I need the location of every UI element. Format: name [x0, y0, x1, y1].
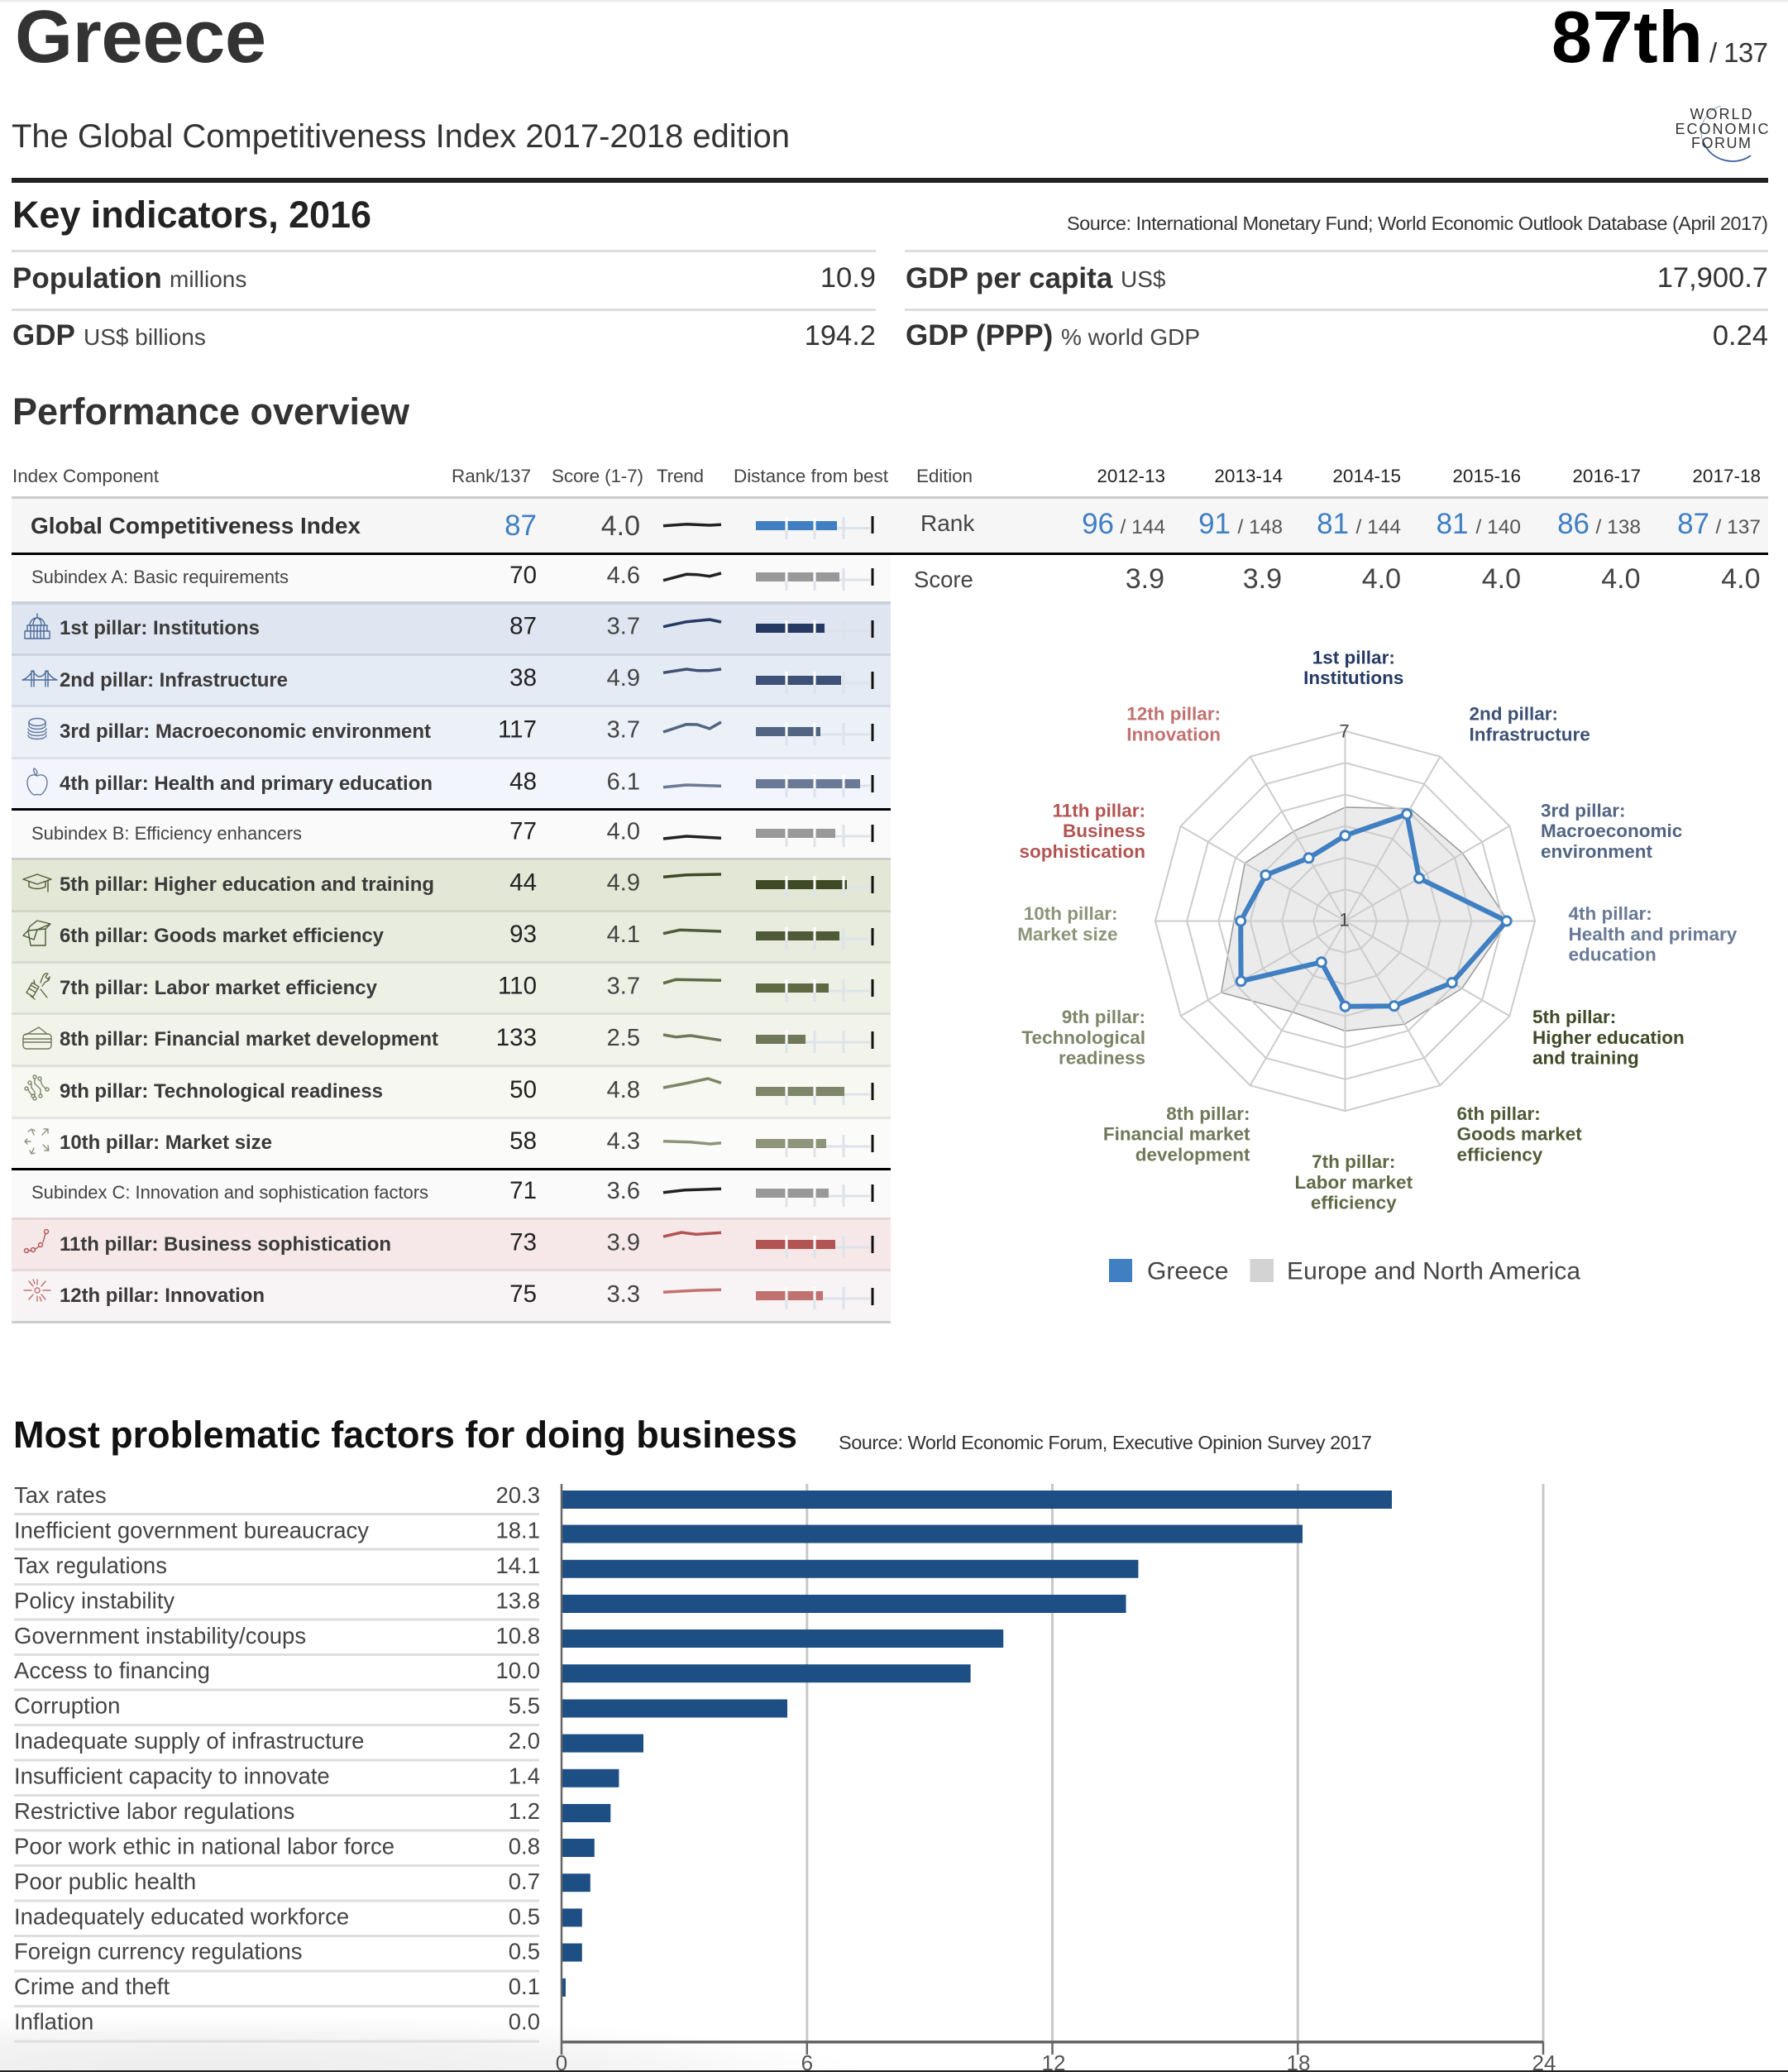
row: 11th pillar: 3.9	[607, 1229, 640, 1256]
icon: apple	[27, 768, 47, 795]
factor values: 2.0	[509, 1728, 540, 1754]
radar label: 5th pillar: Higher education	[1532, 1027, 1685, 1048]
indicator: GDP: GDP	[12, 319, 75, 352]
indicator: GDP PPP: GDP (PPP)	[906, 319, 1053, 352]
sparkline: 4th pillar trend	[663, 785, 721, 787]
radar chart	[1017, 647, 1738, 1285]
score history row: 4.0	[1601, 563, 1641, 595]
row: 8th pillar: 2.5	[607, 1025, 640, 1051]
factor values: 20.3	[495, 1482, 540, 1508]
icon: rising nodes	[25, 1229, 48, 1252]
source note: Source: International Monetary Fund; World Economic Outlook Database (April 2017)	[1067, 213, 1768, 234]
factor labels: Tax rates	[14, 1482, 107, 1508]
radar label: 8th pillar: 8th pillar:	[1166, 1103, 1250, 1124]
radar label: 9th pillar: Technological	[1021, 1027, 1145, 1048]
radar label: 7th pillar	[1295, 1151, 1413, 1213]
edition header: 2015-16	[1452, 466, 1521, 486]
edition header: 2014-15	[1332, 466, 1401, 486]
bar: 5th pillar distance from best	[756, 876, 872, 898]
bar: 12th pillar distance from best	[756, 1287, 872, 1309]
Greece score markers	[1236, 810, 1511, 1011]
radar label: 8th pillar: development	[1135, 1145, 1250, 1165]
score history row: 3.9	[1243, 563, 1282, 595]
indicator: GDP: US$ billions	[84, 324, 206, 350]
factor values: 5.5	[509, 1693, 540, 1719]
radar plot: 1	[1339, 910, 1350, 930]
rank history row: / 138	[1596, 516, 1641, 538]
row: Global Competitiveness Index: 4.0	[601, 510, 640, 542]
axes	[562, 1484, 1543, 2055]
logo: World Economic Forum: ECONOMIC	[1676, 121, 1768, 137]
table header: Trend	[657, 466, 704, 486]
bar: GCI distance from best	[756, 516, 872, 539]
rank history row: / 148	[1237, 516, 1283, 538]
factor values: 1.4	[509, 1763, 540, 1788]
edition header: 2017-18	[1692, 466, 1761, 486]
row: 7th pillar: 3.7	[607, 973, 640, 999]
radar label: 2nd pillar	[1469, 703, 1590, 744]
radar label: 2nd pillar: 2nd pillar:	[1469, 703, 1558, 725]
bar: 8th pillar distance from best	[756, 1031, 872, 1053]
radar label: 9th pillar: readiness	[1059, 1047, 1145, 1069]
row: Subindex A: Subindex A: Basic requirements	[31, 567, 289, 587]
sparkline: 5th pillar trend	[663, 874, 721, 877]
radar label: 3rd pillar	[1541, 801, 1682, 862]
radar label: 11th pillar	[1019, 801, 1145, 862]
indicator: population	[12, 262, 876, 294]
indicator: population: 10.9	[820, 262, 876, 294]
row: 12th pillar: 75	[509, 1280, 537, 1308]
indicator: GDP PPP: 0.24	[1713, 320, 1768, 352]
factor labels: Crime and theft	[14, 1974, 170, 1999]
factor labels: Inadequately educated workforce	[14, 1903, 349, 1929]
row: Subindex C: 3.6	[607, 1178, 640, 1204]
row: Subindex B: Subindex B: Efficiency enhancers	[31, 823, 302, 844]
row: 9th pillar: 50	[509, 1076, 537, 1103]
row: 6th pillar: 4.1	[607, 921, 640, 948]
score history row	[914, 563, 1760, 595]
rank history row: / 144	[1120, 516, 1165, 538]
sparkline: 2nd pillar trend	[663, 669, 721, 672]
heading: key indicators: Key indicators, 2016	[12, 194, 371, 236]
row: 12th pillar	[24, 1280, 872, 1309]
row: 2nd pillar: 4.9	[607, 665, 640, 691]
row: 9th pillar	[25, 1075, 872, 1105]
factor labels: Access to financing	[14, 1658, 210, 1683]
row: 5th pillar: 44	[509, 869, 537, 897]
factor values: 0.8	[509, 1833, 540, 1859]
row: 3rd pillar: 117	[498, 716, 537, 743]
radar label: 7th pillar: efficiency	[1311, 1193, 1397, 1213]
indicator: population: Population	[12, 262, 162, 294]
panel: key indicators	[12, 194, 1768, 352]
bar: 11th pillar distance from best	[756, 1236, 872, 1258]
icon: wrench and hand	[26, 974, 50, 999]
row: Subindex C: 71	[509, 1177, 537, 1204]
indicator: GDP per capita: GDP per capita	[906, 262, 1113, 294]
radar label: 6th pillar	[1457, 1103, 1582, 1165]
rank history row: / 144	[1356, 516, 1401, 538]
sparkline: 10th pillar trend	[663, 1141, 721, 1144]
row: Global Competitiveness Index: 87	[504, 510, 537, 542]
radar label: 8th pillar	[1103, 1103, 1250, 1165]
score history row: Score	[914, 567, 973, 592]
factor values: 0.1	[509, 1974, 540, 1999]
row: 5th pillar	[23, 869, 872, 898]
factor values: 10.8	[495, 1623, 540, 1649]
factor labels: Insufficient capacity to innovate	[14, 1763, 330, 1788]
indicator: GDP per capita: 17,900.7	[1657, 262, 1768, 294]
radar label: 5th pillar: 5th pillar:	[1532, 1007, 1616, 1027]
logo: World Economic Forum	[1676, 106, 1768, 161]
table header: Index Component	[12, 466, 160, 486]
icon: capitol building	[25, 614, 50, 639]
row: 3rd pillar: 3rd pillar: Macroeconomic environment	[60, 720, 431, 743]
score history row: 4.0	[1482, 563, 1521, 595]
row: 1st pillar: 1st pillar: Institutions	[60, 617, 260, 639]
icon: circuit nodes	[25, 1075, 49, 1100]
edition header	[916, 466, 1761, 486]
rank history row: 81	[1317, 508, 1349, 540]
radar label: 11th pillar: sophistication	[1019, 841, 1145, 862]
factor labels	[14, 1482, 394, 2035]
radar label: 1st pillar	[1303, 647, 1403, 688]
row: 10th pillar	[25, 1127, 872, 1157]
radar label: 4th pillar	[1568, 903, 1738, 964]
row: 2nd pillar: 2nd pillar: Infrastructure	[60, 669, 288, 691]
row: 7th pillar: 7th pillar: Labor market efficiency	[60, 977, 378, 999]
row: 6th pillar	[23, 921, 872, 950]
factor values	[495, 1482, 540, 2035]
indicator: GDP per capita: US$	[1121, 266, 1166, 292]
score history row: 3.9	[1126, 563, 1164, 595]
row: Subindex B	[31, 817, 872, 847]
row: 3rd pillar	[28, 716, 872, 745]
logo: World Economic Forum: FORUM	[1691, 135, 1751, 151]
row: 2nd pillar	[22, 664, 872, 694]
row: 7th pillar	[26, 973, 872, 1002]
radar label: 12th pillar: Innovation	[1126, 725, 1221, 744]
radar label: 5th pillar: and training	[1532, 1047, 1639, 1069]
bar: subindex B distance from best	[756, 825, 872, 847]
heading: most problematic factors: Most problematic factors for doing business	[13, 1414, 797, 1456]
radar label: 7th pillar: Labor market	[1295, 1172, 1413, 1193]
radar label: 7th pillar: 7th pillar:	[1312, 1151, 1395, 1172]
edition header: Edition	[916, 466, 973, 486]
panel: problematic factors list	[14, 1482, 540, 2043]
radar label: 3rd pillar: 3rd pillar:	[1541, 801, 1626, 821]
radar label: 4th pillar: 4th pillar:	[1568, 903, 1652, 924]
overall rank	[1551, 0, 1768, 78]
factor labels: Tax regulations	[14, 1553, 167, 1578]
row: 4th pillar: 48	[509, 768, 537, 796]
factor labels: Inflation	[14, 2009, 93, 2035]
rank history row: 96	[1082, 508, 1114, 540]
row: Subindex B: 4.0	[607, 819, 640, 845]
row: Subindex C: Subindex C: Innovation and sophistication factors	[31, 1182, 428, 1203]
indicator: GDP PPP	[906, 319, 1768, 352]
icon: graduation cap	[23, 874, 51, 892]
table header: Score (1-7)	[552, 466, 643, 486]
sparkline: 7th pillar trend	[663, 979, 721, 983]
bar: 2nd pillar distance from best	[756, 672, 872, 694]
panel: performance table	[12, 466, 1768, 1323]
indicator: population: millions	[170, 266, 246, 292]
row: 1st pillar	[25, 612, 872, 642]
edition header: 2016-17	[1572, 466, 1641, 486]
radar label: 10th pillar	[1017, 903, 1118, 945]
row: 9th pillar: 9th pillar: Technological readiness	[60, 1080, 383, 1103]
radar label: 5th pillar	[1532, 1007, 1685, 1069]
row: 5th pillar: 4.9	[607, 870, 640, 897]
row: 3rd pillar: 3.7	[607, 716, 640, 743]
factor values: 13.8	[495, 1587, 540, 1613]
row: 6th pillar: 93	[509, 921, 537, 948]
row: Global Competitiveness Index	[31, 510, 872, 542]
radar label: 12th pillar	[1126, 703, 1221, 744]
row: 6th pillar: 6th pillar: Goods market efficiency	[60, 925, 385, 947]
factor labels: Restrictive labor regulations	[14, 1798, 294, 1824]
row: 4th pillar: 4th pillar: Health and primary education	[60, 773, 433, 795]
table header: Rank/137	[452, 466, 531, 486]
radar label: 9th pillar: 9th pillar:	[1062, 1007, 1145, 1027]
sparkline: subindex A trend	[663, 573, 721, 581]
rank history row: 87	[1677, 508, 1709, 540]
sparkline: 11th pillar trend	[663, 1232, 721, 1237]
rank history row: / 140	[1475, 516, 1521, 538]
score history row: 4.0	[1362, 563, 1401, 595]
row: 7th pillar: 110	[498, 973, 537, 999]
row: 8th pillar	[23, 1024, 872, 1053]
factor values: 1.2	[509, 1798, 540, 1824]
radar label: 10th pillar: Market size	[1017, 924, 1118, 945]
bar: subindex C distance from best	[756, 1184, 872, 1207]
heading: performance overview: Performance overview	[12, 390, 410, 433]
sparkline: GCI trend	[663, 524, 721, 526]
radar label: 4th pillar: Health and primary	[1568, 924, 1738, 945]
radar label: 8th pillar: Financial market	[1103, 1123, 1250, 1145]
Greece score line	[1241, 814, 1507, 1007]
sparkline: 9th pillar trend	[663, 1079, 721, 1088]
radar label: 1st pillar: 1st pillar:	[1312, 647, 1395, 668]
factor labels: Corruption	[14, 1693, 120, 1719]
sparkline: 6th pillar trend	[663, 930, 721, 934]
factor labels: Government instability/coups	[14, 1623, 306, 1649]
bar: 10th pillar distance from best	[756, 1135, 872, 1157]
radar label: 1st pillar: Institutions	[1303, 668, 1403, 688]
row: Subindex C	[31, 1177, 872, 1207]
icon: open box	[23, 921, 50, 945]
rank history row: Rank	[920, 510, 975, 536]
radar plot: 7	[1339, 721, 1350, 741]
radar label: 6th pillar: efficiency	[1457, 1145, 1543, 1165]
radar label: 10th pillar: 10th pillar:	[1024, 903, 1118, 924]
row: Subindex A: 4.6	[607, 562, 640, 589]
radar label: 11th pillar: 11th pillar:	[1052, 801, 1145, 821]
sparkline: 3rd pillar trend	[663, 722, 721, 732]
edition header: 2012-13	[1097, 466, 1165, 486]
sparkline: 1st pillar trend	[663, 620, 721, 627]
sparkline: 8th pillar trend	[663, 1035, 721, 1041]
bar: 4th pillar distance from best	[756, 775, 872, 797]
icon: outward arrows	[25, 1129, 49, 1154]
factor labels: Poor public health	[14, 1869, 196, 1894]
row: 4th pillar: 6.1	[607, 769, 640, 796]
legend	[1109, 1257, 1580, 1285]
factor labels: Inadequate supply of infrastructure	[14, 1728, 364, 1754]
factor labels: Foreign currency regulations	[14, 1939, 303, 1964]
bar: 6th pillar distance from best	[756, 927, 872, 950]
icon: spark burst	[24, 1280, 50, 1301]
factor values: 0.0	[509, 2009, 540, 2035]
row: 10th pillar: 58	[509, 1127, 537, 1155]
radar label: 2nd pillar: Infrastructure	[1469, 725, 1590, 744]
score history row: 4.0	[1721, 563, 1760, 595]
rank history row: 86	[1557, 508, 1590, 540]
row: 11th pillar: 73	[509, 1229, 537, 1256]
factor values: 0.5	[509, 1939, 540, 1964]
legend: Europe and North America	[1287, 1257, 1580, 1285]
row: 12th pillar: 3.3	[607, 1281, 640, 1308]
row: 4th pillar	[27, 768, 872, 797]
factor labels: Inefficient government bureaucracy	[14, 1517, 369, 1543]
radar label: 11th pillar: Business	[1063, 821, 1145, 841]
row: Subindex B: 77	[509, 817, 537, 845]
factor labels: Poor work ethic in national labor force	[14, 1833, 394, 1859]
row: 8th pillar: 133	[496, 1024, 537, 1051]
logo: World Economic Forum: WORLD	[1690, 106, 1752, 122]
axis tick labels	[556, 2050, 1556, 2072]
factor values: 10.0	[495, 1658, 540, 1683]
radar label: 3rd pillar: environment	[1541, 841, 1653, 862]
radar plot	[1155, 721, 1535, 1111]
row: 10th pillar: 10th pillar: Market size	[60, 1132, 272, 1154]
row: 1st pillar: 3.7	[607, 614, 640, 640]
factor values: 0.7	[509, 1869, 540, 1894]
indicator: GDP PPP: % world GDP	[1061, 324, 1200, 350]
row: 1st pillar: 87	[509, 612, 537, 640]
radar label: 12th pillar: 12th pillar:	[1126, 703, 1221, 725]
radar label: 3rd pillar: Macroeconomic	[1541, 821, 1682, 841]
bar: subindex A distance from best	[756, 568, 872, 591]
row: 12th pillar: 12th pillar: Innovation	[60, 1285, 265, 1307]
bar chart: problematic factors	[556, 1484, 1556, 2072]
row: 2nd pillar: 38	[509, 664, 537, 691]
table header: Distance from best	[734, 466, 889, 486]
icon: bank cards	[23, 1027, 51, 1049]
subtitle: The Global Competitiveness Index 2017-2018 edition	[12, 118, 790, 155]
sparkline: 12th pillar trend	[663, 1290, 721, 1292]
sparkline: subindex C trend	[663, 1189, 721, 1193]
row: 11th pillar	[25, 1229, 872, 1258]
row: 10th pillar: 4.3	[607, 1128, 640, 1155]
panel: edition history table	[914, 466, 1761, 595]
factor values: 0.5	[509, 1903, 540, 1929]
bar: 9th pillar distance from best	[756, 1083, 872, 1105]
bar: 3rd pillar distance from best	[756, 723, 872, 745]
row: Subindex A	[31, 562, 872, 591]
bar: 7th pillar distance from best	[756, 979, 872, 1002]
rank history row: 81	[1437, 508, 1469, 540]
row: 8th pillar: 8th pillar: Financial market development	[60, 1028, 438, 1050]
edition header: 2013-14	[1214, 466, 1283, 486]
bars	[562, 1491, 1392, 1997]
row: 5th pillar: 5th pillar: Higher education and training	[60, 873, 434, 896]
source note: opinion survey: Source: World Economic Forum, Executive Opinion Survey 2017	[839, 1432, 1372, 1453]
overall rank: / 137	[1709, 37, 1768, 68]
rank history row: 91	[1198, 508, 1231, 540]
indicator: GDP per capita	[906, 262, 1768, 294]
sparkline: subindex B trend	[663, 836, 721, 839]
row: 9th pillar: 4.8	[607, 1077, 640, 1103]
icon: bridge	[22, 671, 57, 687]
radar label: 4th pillar: education	[1568, 945, 1657, 964]
factor labels: Policy instability	[14, 1587, 174, 1613]
row: 11th pillar: 11th pillar: Business sophistication	[60, 1233, 391, 1256]
row: Subindex A: 70	[509, 562, 537, 589]
indicator: GDP	[12, 319, 876, 352]
rank history row: / 137	[1715, 516, 1761, 538]
table header	[12, 466, 889, 486]
factor values: 18.1	[495, 1517, 540, 1543]
factor values: 14.1	[495, 1553, 540, 1578]
rank history row	[920, 508, 1761, 540]
legend: Greece	[1147, 1257, 1228, 1285]
row: Global Competitiveness Index: Global Competitiveness Index	[31, 513, 361, 538]
radar label: 6th pillar: 6th pillar:	[1457, 1103, 1541, 1124]
icon: coin stack	[28, 718, 46, 739]
indicator: GDP: 194.2	[805, 320, 876, 352]
radar label: 6th pillar: Goods market	[1457, 1123, 1582, 1145]
regional average area	[1221, 807, 1508, 1031]
bar: 1st pillar distance from best	[756, 620, 872, 642]
radar label: 9th pillar	[1021, 1007, 1145, 1069]
